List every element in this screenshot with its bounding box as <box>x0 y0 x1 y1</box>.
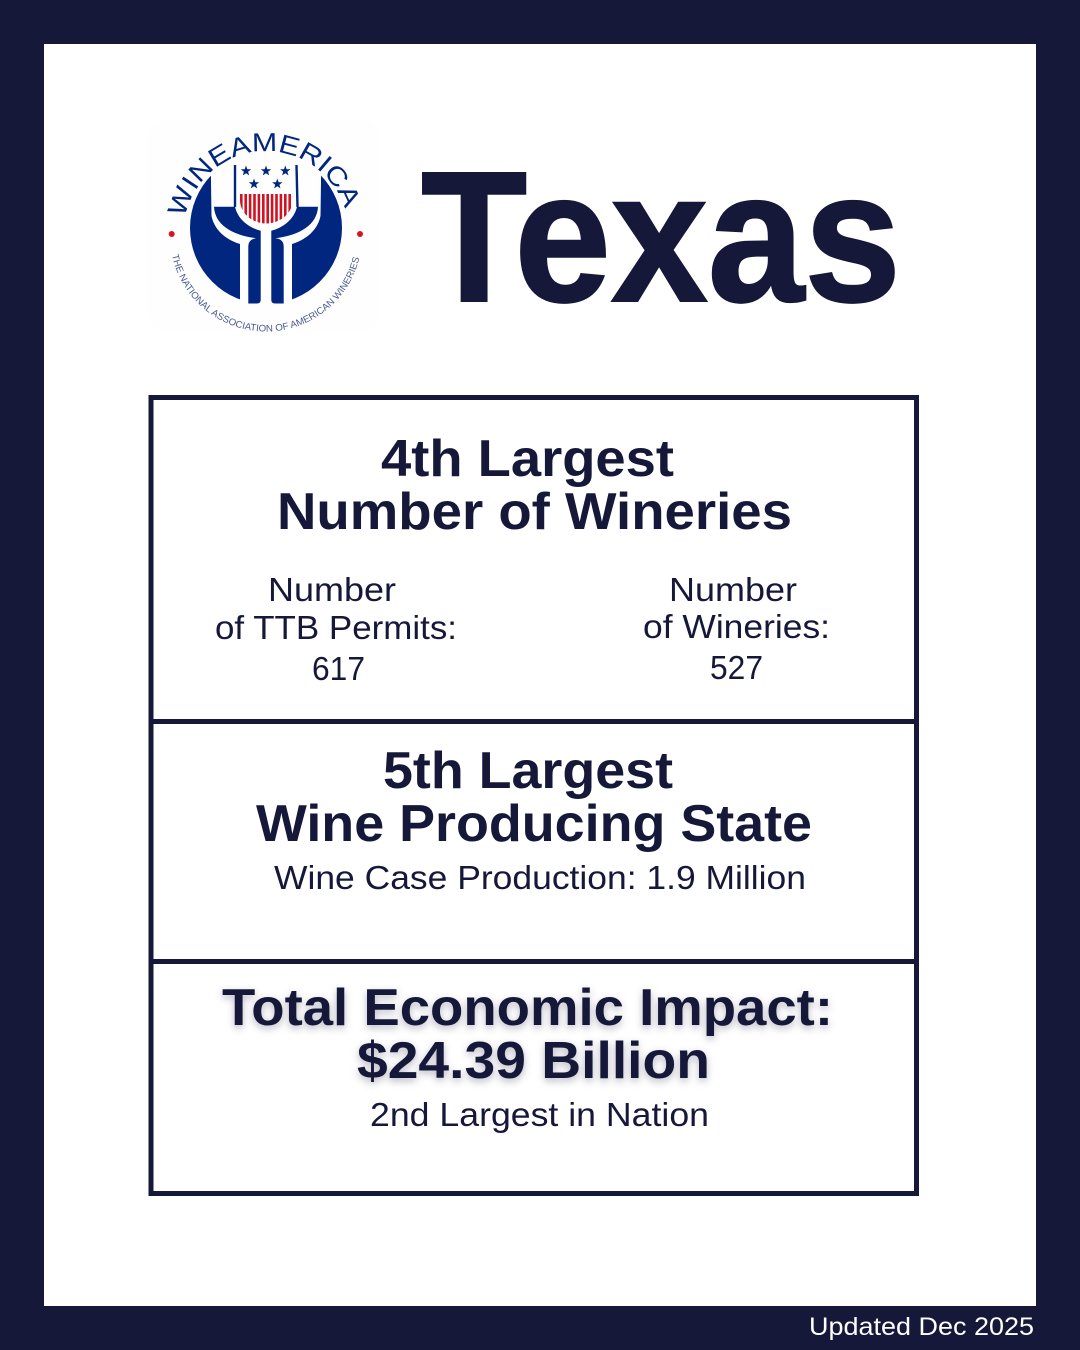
stat: wineries: Number <box>669 571 797 608</box>
title: Texas <box>421 134 901 341</box>
heading: number of wineries: Number of Wineries <box>277 483 792 541</box>
icon: WineAmerica logo: THE NATIONAL ASSOCIATION OF AMERICAN WINERIES <box>172 254 359 332</box>
footer: updated date: Updated Dec 2025 <box>809 1313 1034 1341</box>
heading: total economic impact: Total Economic Impact: <box>222 979 833 1037</box>
icon: WineAmerica logo: WINEAMERICA <box>167 133 358 212</box>
text: rank: 2nd Largest in Nation <box>370 1096 709 1133</box>
stat: wineries: 527 <box>710 649 763 686</box>
stat: wineries <box>643 571 830 686</box>
heading: dollar value: $24.39 Billion <box>357 1032 710 1090</box>
heading: wine producing state: Wine Producing State <box>256 795 812 853</box>
stat: TTB permits <box>215 571 457 687</box>
panel: economic impact <box>151 962 916 1194</box>
panel: wineries <box>151 398 916 722</box>
heading: 5th largest: 5th Largest <box>383 742 673 800</box>
stat: TTB permits: of TTB Permits: <box>215 609 457 646</box>
stat: wineries: of Wineries: <box>643 608 830 645</box>
heading: 4th largest: 4th Largest <box>381 430 674 488</box>
stat: TTB permits: 617 <box>312 650 365 687</box>
panel: production <box>151 722 916 962</box>
text: case production: Wine Case Production: 1.9 Million <box>274 859 806 896</box>
icon: WineAmerica logo <box>167 133 363 332</box>
stat: TTB permits: Number <box>268 571 396 608</box>
